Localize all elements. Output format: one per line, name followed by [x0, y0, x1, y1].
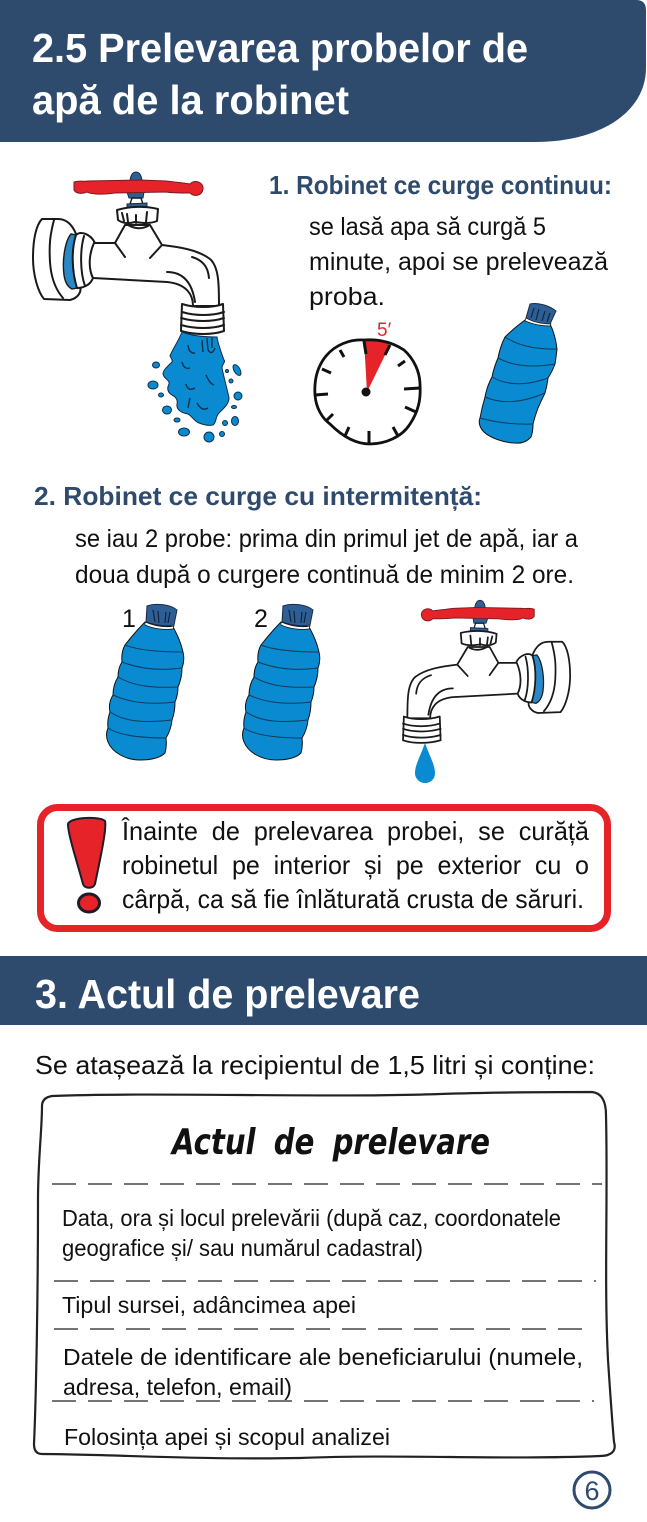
icon: tilted bottle — [479, 303, 557, 443]
icon: bottle 2 — [242, 604, 320, 760]
text: warning text: robinetul pe interior și pe exterior cu o — [122, 850, 589, 880]
page number: 6 — [584, 1476, 600, 1506]
page number — [574, 1472, 610, 1508]
text: step 2 instructions: doua după o curgere continuă de minim 2 ore. — [75, 561, 574, 589]
form item: date and place: geografice și/ sau numărul cadastral) — [62, 1235, 423, 1261]
icon: faucet with running water — [33, 172, 243, 442]
form item: beneficiary: adresa, telefon, email) — [63, 1374, 292, 1400]
section banner: Actul de prelevare — [0, 956, 647, 1025]
form item: date and place: Data, ora și locul prelevării (după caz, coordonatele — [62, 1205, 561, 1231]
text: step 2 instructions: se iau 2 probe: prima din primul jet de apă, iar a — [75, 525, 578, 553]
icon: bottle 1 — [106, 604, 184, 760]
icon: bottle 2: 2 — [254, 605, 268, 633]
icon: dripping faucet — [403, 600, 570, 783]
form title: Actul de prelevare — [170, 1122, 490, 1163]
form item: beneficiary: Datele de identificare ale beneficiarului (numele, — [63, 1344, 583, 1370]
icon: exclamation mark — [68, 818, 105, 912]
header banner — [0, 0, 646, 142]
title: 2.5 Prelevarea probelor de — [32, 25, 528, 71]
text: step 2 instructions — [75, 525, 578, 589]
text: step 1 instructions — [309, 213, 608, 311]
callout: warning — [40, 808, 608, 928]
text: step 1 instructions: minute, apoi se prelevează — [309, 248, 608, 276]
text: warning text: Înainte de prelevarea probei, se curăță — [121, 816, 590, 846]
form item: use: Folosința apei și scopul analizei — [64, 1424, 390, 1450]
icon: clock with 5 minutes — [315, 320, 420, 444]
form item: beneficiary — [63, 1344, 583, 1400]
heading: step 2: 2. Robinet ce curge cu intermitență: — [34, 481, 482, 511]
text: warning text — [121, 816, 590, 914]
label: 5 minutes: 5′ — [377, 320, 392, 341]
icon: bottle 1: 1 — [122, 605, 136, 633]
form item: date and place — [62, 1205, 561, 1261]
panel: sampling form — [34, 1092, 615, 1458]
heading: step 1: 1. Robinet ce curge continuu: — [269, 170, 612, 200]
form item: source: Tipul sursei, adâncimea apei — [62, 1292, 356, 1318]
text: warning text: cârpă, ca să fie înlăturată crusta de săruri. — [122, 884, 584, 914]
text: step 1 instructions: proba. — [309, 283, 385, 311]
title — [32, 25, 528, 123]
text: intro: Se atașează la recipientul de 1,5 litri și conține: — [35, 1050, 595, 1080]
section banner: Actul de prelevare: 3. Actul de prelevare — [35, 971, 420, 1017]
text: step 1 instructions: se lasă apa să curgă 5 — [309, 213, 546, 241]
title: apă de la robinet — [32, 77, 349, 123]
